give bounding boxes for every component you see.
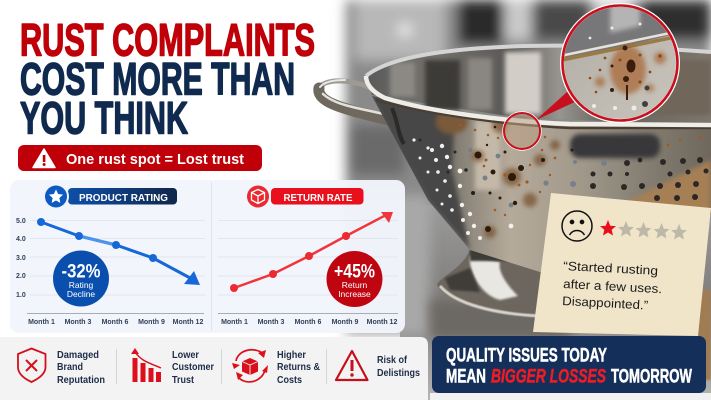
review quote	[562, 259, 662, 312]
colander base	[437, 248, 560, 318]
chart: return rate: Month 6	[295, 319, 322, 326]
chart: return rate: Month 1	[221, 319, 248, 326]
chart: return rate: Month 12	[367, 319, 397, 326]
return increase badge: +45%	[334, 262, 375, 282]
star rating: one of five	[600, 220, 687, 240]
colander handle	[319, 80, 396, 122]
review quote: Disappointed.”	[562, 294, 648, 312]
chart: product rating	[16, 184, 205, 326]
chart: product rating: Month 12	[173, 319, 203, 326]
rating decline badge	[53, 250, 109, 306]
review quote: “Started rusting	[563, 259, 658, 278]
callout: closing message	[432, 336, 706, 393]
product rating heading	[43, 184, 177, 210]
callout: closing message: QUALITY ISSUES TODAY	[446, 344, 607, 366]
risk: higher returns and costs	[232, 349, 320, 386]
return increase badge: Increase	[338, 289, 371, 299]
risk: lower customer trust	[131, 348, 214, 386]
risk: delistings: Delistings	[377, 367, 420, 379]
chart: return rate: Month 3	[258, 319, 285, 326]
chart: product rating: Month 3	[65, 319, 92, 326]
risk: delistings: Risk of	[377, 354, 407, 366]
chart: product rating: 4.0	[16, 236, 26, 243]
product rating heading: PRODUCT RATING	[79, 192, 168, 204]
risk: damaged brand reputation: Reputation	[57, 374, 105, 386]
rating decline badge: -32%	[62, 262, 101, 282]
chart: product rating: Month 6	[102, 319, 129, 326]
warning pill: One rust spot = Lost trust	[66, 151, 244, 168]
risk: lower customer trust: Customer	[172, 361, 214, 373]
chart: product rating: 1.0	[16, 292, 26, 299]
return increase badge	[326, 251, 382, 307]
risk: damaged brand reputation: Damaged	[57, 349, 99, 361]
magnifier: close-up of rust	[503, 0, 680, 150]
risk: damaged brand reputation	[18, 348, 105, 386]
title: YOU THINK	[20, 92, 188, 144]
risk: lower customer trust: Lower	[172, 349, 199, 361]
colander rim	[366, 46, 711, 144]
chart: product rating: Month 9	[138, 319, 165, 326]
icon: warning triangle	[33, 149, 55, 168]
rating decline badge: Rating	[69, 280, 94, 290]
return increase badge: Return	[342, 280, 368, 290]
callout: closing message: BIGGER LOSSES	[491, 366, 606, 388]
title	[20, 14, 315, 144]
title: COST MORE THAN	[20, 54, 295, 104]
risk: higher returns and costs: Returns &	[277, 361, 320, 373]
chart: product rating: 5.0	[16, 218, 26, 225]
chart: return rate	[218, 184, 398, 326]
risk: higher returns and costs: Higher	[277, 349, 306, 361]
return rate heading: RETURN RATE	[284, 192, 352, 204]
review quote: after a few uses.	[563, 277, 662, 296]
bowl body with holes and rust	[365, 90, 711, 280]
sticky note: customer review	[533, 193, 711, 336]
cardboard behind note	[698, 290, 711, 380]
panel: risks strip	[0, 337, 428, 400]
risk: delistings	[336, 351, 420, 380]
panel: charts card	[10, 180, 405, 333]
chart: product rating: Month 1	[28, 319, 55, 326]
warning pill	[18, 145, 262, 171]
chart: product rating: 3.0	[16, 255, 26, 262]
callout: closing message: MEAN	[446, 366, 486, 388]
chart: product rating: 2.0	[16, 273, 26, 280]
bowl interior	[366, 45, 711, 125]
rating decline badge: Decline	[67, 289, 95, 299]
return rate heading	[245, 184, 364, 210]
title: RUST COMPLAINTS	[20, 14, 315, 66]
icon: sad face	[562, 211, 592, 241]
risk: lower customer trust: Trust	[172, 374, 194, 386]
chart: return rate: Month 9	[332, 319, 359, 326]
risk: higher returns and costs: Costs	[277, 374, 302, 386]
risk: damaged brand reputation: Brand	[57, 361, 83, 373]
